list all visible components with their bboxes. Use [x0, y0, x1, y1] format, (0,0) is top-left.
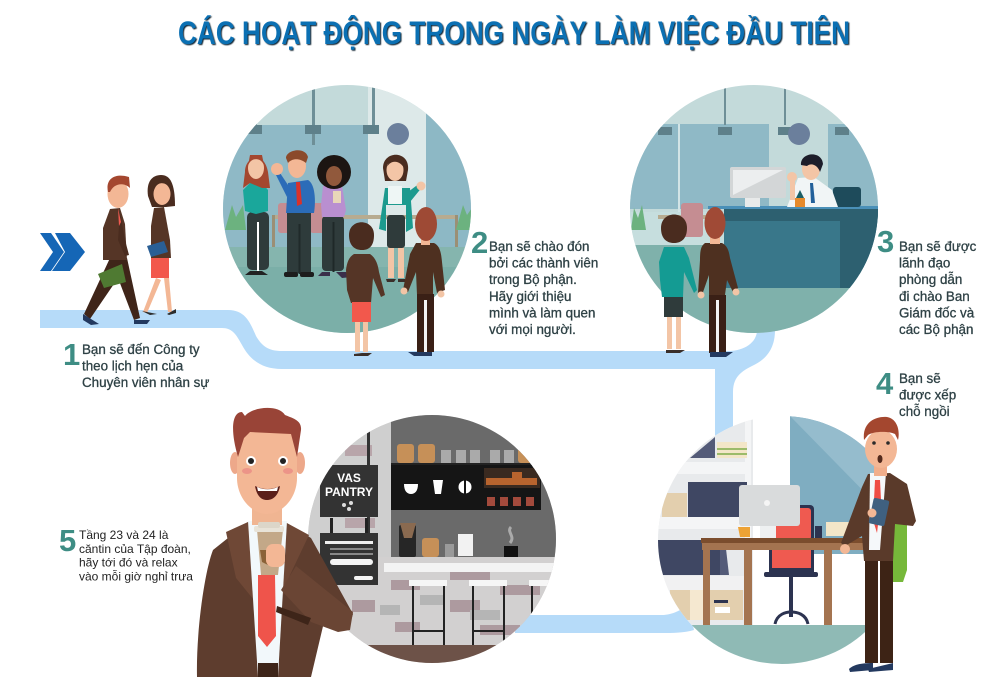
number 2: 2 — [471, 225, 488, 260]
sign: VAS PANTRY — [320, 465, 378, 533]
monitor and mug — [738, 485, 800, 538]
walking new employees — [83, 175, 176, 325]
text: step 2 — [471, 225, 598, 337]
description 5: Tầng 23 và 24 là — [79, 528, 169, 542]
description 2: Bạn sẽ chào đón — [489, 239, 590, 254]
number 5: 5 — [59, 523, 76, 558]
man seen from behind — [400, 207, 445, 356]
coffee cup — [254, 522, 284, 575]
computer monitor — [730, 167, 786, 207]
description 5: vào mỗi giờ nghỉ trưa — [79, 568, 193, 583]
title: CÁC HOẠT ĐỘNG TRONG NGÀY LÀM VIỆC ĐẦU TIÊN — [178, 15, 850, 51]
description 2: với mọi người. — [489, 322, 576, 337]
reception desk — [708, 206, 878, 288]
description 3: Giám đốc và — [899, 305, 975, 320]
woman in teal from behind — [659, 214, 697, 353]
employee with phone — [840, 417, 916, 672]
man with briefcase — [83, 176, 150, 325]
woman in teal shirt — [243, 155, 270, 275]
icon: start chevrons — [40, 233, 85, 271]
woman seen from behind — [346, 222, 385, 356]
description 2: bởi các thành viên — [489, 256, 598, 271]
description 1: Bạn sẽ đến Công ty — [82, 342, 200, 357]
description 5: hãy tới đó và relax — [79, 556, 178, 570]
panel: reception scene — [629, 85, 879, 357]
description 3: phòng dẫn — [899, 272, 962, 287]
chair — [833, 187, 861, 207]
panel: office desk scene — [658, 416, 916, 672]
text: step 3 — [877, 224, 977, 337]
menu board — [320, 533, 378, 585]
text: step 5 — [59, 523, 193, 583]
description 4: Bạn sẽ — [899, 371, 941, 386]
description 2: trong Bộ phận. — [489, 272, 577, 287]
panel: pantry scene — [308, 415, 559, 665]
description 2: Hãy giới thiệu — [489, 289, 571, 304]
description 1: theo lịch hẹn của — [82, 359, 184, 374]
description 1: Chuyên viên nhân sự — [82, 375, 209, 390]
journey path — [40, 310, 775, 633]
bar stools — [409, 580, 559, 645]
employee with coffee — [197, 408, 353, 677]
woman with curly hair and coffee — [317, 155, 352, 278]
office chair — [764, 505, 818, 624]
description 5: căntin của Tập đoàn, — [79, 542, 191, 556]
desk — [701, 538, 864, 625]
description 2: mình và làm quen — [489, 305, 595, 320]
description 4: được xếp — [899, 388, 956, 403]
man in brown from behind — [698, 207, 740, 357]
number 4: 4 — [876, 366, 894, 401]
sign: VAS PANTRY: PANTRY — [325, 485, 373, 499]
panel: team welcome scene — [223, 85, 476, 356]
text: step 4 — [876, 366, 956, 419]
green backpack — [892, 512, 907, 582]
text: step 1 — [63, 337, 209, 390]
sign: VAS PANTRY: VAS — [337, 471, 361, 485]
description 3: Bạn sẽ được — [899, 239, 977, 254]
man in blue shirt waving — [271, 150, 315, 277]
description 3: lãnh đạo — [899, 256, 950, 271]
number 3: 3 — [877, 224, 894, 259]
description 3: các Bộ phận — [899, 322, 973, 337]
number 1: 1 — [63, 337, 80, 372]
description 4: chỗ ngồi — [899, 404, 950, 419]
black menu panel — [391, 465, 541, 510]
description 3: đi chào Ban — [899, 289, 970, 304]
woman in teal jacket — [379, 155, 426, 282]
woman with folder — [142, 175, 176, 315]
jars and glasses shelf — [397, 444, 533, 463]
receptionist — [787, 154, 838, 207]
